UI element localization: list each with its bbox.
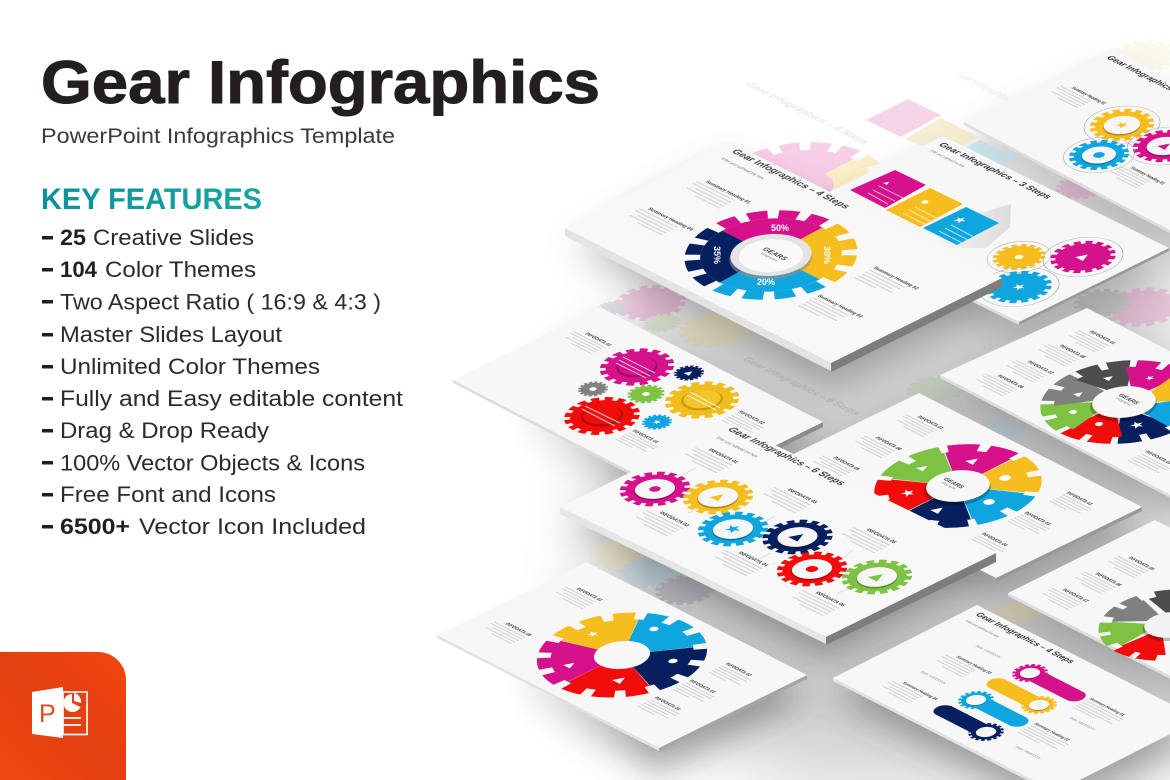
percent labels: 35% (712, 246, 722, 264)
gear: green (622, 382, 670, 406)
gear: navy (670, 363, 708, 383)
ring gear (469, 579, 775, 731)
ambient grey backdrop (560, 170, 1170, 780)
headings: INFODATA 06 (873, 436, 903, 451)
headings: Summary Heading 02 (955, 655, 994, 675)
heading 01 (682, 178, 752, 213)
title: Gear Infographics – 3 Steps (936, 141, 1055, 200)
ghost reflections of slides (579, 35, 1170, 629)
pill: magenta (1007, 662, 1094, 706)
feature 9: Free Font and Icons (60, 482, 276, 507)
title: Gear Infographics – 4 Steps (973, 611, 1078, 665)
slide: left multi gears (453, 307, 823, 499)
headings: INFODATA 05 (831, 456, 861, 471)
gear centre label: GEARS (1116, 393, 1141, 406)
headings: INFODATA 01 (1087, 330, 1117, 345)
feature 1: Creative Slides (93, 225, 254, 250)
heading 02 (855, 266, 920, 299)
gear: red (553, 392, 651, 440)
title: Gear Infographics – 4 Steps (728, 148, 853, 211)
headings: INFODATA 01 (574, 587, 604, 602)
heading 02 (722, 410, 771, 435)
headings: Summary Heading 03 (1033, 722, 1072, 742)
headings: INFODATA 03 (687, 679, 717, 694)
heading 01: INFODATA 01 (583, 332, 613, 347)
feature 2 (42, 257, 256, 282)
ghost box yellow (905, 118, 978, 155)
feature 2: Color Themes (105, 257, 256, 282)
dates: Date: MM/DD/YY (974, 644, 1003, 659)
box yellow (886, 188, 963, 227)
gear segments (1041, 560, 1170, 690)
ring gear icons (563, 626, 679, 684)
headings: INFODATA 02 (1064, 491, 1094, 506)
headings (481, 583, 758, 721)
gear: magenta (1111, 119, 1170, 173)
headings: INFODATA 05 (864, 528, 898, 545)
headings: INFODATA 04 (736, 551, 770, 568)
subtitle: Enter your subhead line here (715, 436, 760, 458)
gear: yellow (974, 235, 1064, 279)
headings (878, 651, 1130, 751)
headings: Summary Heading 04 (901, 681, 940, 701)
box blue (923, 207, 999, 245)
ghost title 6 steps: Gear Infographics – 6 Steps (739, 356, 864, 417)
heading 01: Summary Heading 01 (703, 180, 752, 205)
slide shadows (437, 68, 1170, 780)
gear 8 icons (1067, 375, 1157, 429)
feature 10: 6500+ (60, 514, 130, 539)
percent labels: 50% (771, 223, 789, 233)
subtitle: PowerPoint Infographics Template (41, 125, 395, 148)
ghost gears lower (579, 530, 724, 609)
headings (973, 326, 1170, 475)
gear: magenta (610, 467, 700, 511)
gear centre label: Infographic (940, 481, 958, 490)
heading 03: Summary Heading 03 (815, 294, 864, 319)
ghost box pink (866, 99, 941, 137)
headings (809, 411, 1099, 557)
slide: Gear Infographics 4 Steps (565, 141, 1002, 372)
percent labels: 30% (822, 246, 832, 264)
percent labels (712, 223, 832, 287)
gear 6 icons (899, 457, 1013, 514)
gear: navy (752, 515, 843, 559)
headings: INFODATA 09 (1126, 556, 1156, 571)
gear: green (832, 555, 922, 599)
headings (631, 444, 898, 616)
gear: blue (688, 507, 778, 551)
heading 04: Summary Heading 04 (646, 207, 695, 232)
gear: red (767, 547, 857, 591)
dates (919, 644, 1097, 760)
gear text lines (582, 357, 720, 426)
heading 02: Summary Heading 02 (871, 266, 920, 291)
feature 6: Fully and Easy editable content (60, 386, 404, 411)
headings: INFODATA 02 (657, 511, 691, 528)
heading 02: INFODATA 02 (736, 410, 766, 425)
gear centre label: Infographic (760, 252, 779, 262)
ghost gear pink top (694, 130, 912, 242)
feature 10: Vector Icon Included (139, 514, 366, 539)
feature 5: Unlimited Color Themes (60, 354, 320, 379)
headings: INFODATA 06 (813, 591, 847, 608)
headings: INFODATA 08 (1057, 344, 1087, 359)
gear: yellow (1068, 98, 1170, 152)
box magenta (850, 170, 926, 208)
headings: INFODATA 04 (979, 532, 1009, 547)
gear 4 segments (660, 198, 882, 312)
door (32, 687, 63, 738)
heading 03 (616, 429, 665, 454)
heading 01 (561, 328, 613, 354)
headings: INFODATA 01 (915, 415, 945, 430)
gear: magenta (589, 343, 685, 391)
slide: right 8 segment gear (940, 308, 1170, 503)
P letter: P (39, 700, 56, 728)
slide: Gear Infographics 3 Steps (793, 136, 1169, 325)
percent labels: 20% (757, 277, 775, 287)
slide: Gear Infographics 6 Steps (560, 423, 996, 645)
gear centre label: GEARS (941, 477, 966, 490)
slide: top right 3 gears (964, 48, 1170, 270)
gear 6 segments (811, 413, 1105, 559)
headings: INFODATA 03 (785, 488, 819, 505)
subtitle: Enter your subhead line here (720, 157, 766, 180)
headings: INFODATA 04 (652, 696, 682, 711)
slide: bottom left 5 segment ring gear (437, 562, 807, 752)
connector lines (682, 468, 853, 593)
heading 03 (799, 294, 864, 327)
ghost title small: Gear Infographics (952, 71, 1014, 102)
feature 3: Two Aspect Ratio ( 16:9 & 4:3 ) (60, 290, 381, 314)
feature list (42, 225, 404, 539)
feature 8: 100% Vector Objects & Icons (60, 450, 365, 476)
gear: magenta (1027, 229, 1139, 285)
headings: INFODATA 05 (503, 622, 533, 637)
gear: grey (574, 379, 612, 399)
pill: navy (925, 701, 1009, 743)
slide: 6 segment gear (773, 393, 1142, 582)
ghost title: Gear Infographics – 4 Steps (742, 81, 873, 147)
headings: INFODATA 01 (706, 448, 740, 465)
feature 10 (42, 514, 366, 539)
headings (1038, 552, 1156, 610)
headings: INFODATA 07 (1060, 588, 1090, 603)
ghost box blue (948, 140, 1018, 176)
gear: yellow (654, 376, 750, 424)
title: Gear Infographics (41, 49, 600, 116)
slide: right jigsaw gear (1008, 520, 1170, 710)
headings: INFODATA 03 (1022, 511, 1052, 526)
headings: INFODATA 08 (1093, 572, 1123, 587)
heading: Summary Heading 02 (1069, 86, 1107, 106)
gear centre label: Infographic (1115, 397, 1133, 406)
pill: blue (953, 689, 1037, 731)
gear 8 segments (972, 326, 1170, 478)
subtitle: Enter your subhead line here (964, 619, 1002, 638)
pie (63, 693, 81, 712)
slide: Gear Infographics 4 Steps pills (833, 605, 1170, 780)
heading 04 (625, 205, 695, 240)
feature 4: Master Slides Layout (60, 322, 283, 347)
gear: blue (963, 259, 1075, 315)
subtitle: Enter your subhead line here (929, 149, 967, 168)
headings: INFODATA 07 (1025, 360, 1055, 375)
feature 2: 104 (60, 257, 97, 282)
gear: blue (1049, 130, 1149, 180)
ghost gears left (594, 280, 761, 353)
dates: Date: MM/DD/YY (919, 670, 948, 685)
feature 7: Drag & Drop Ready (60, 418, 270, 443)
arrow (930, 204, 1011, 248)
gear: blue (638, 412, 676, 432)
feature 1: 25 (60, 225, 86, 250)
headings: Summary Heading 01 (1088, 697, 1127, 717)
headings: INFODATA 06 (995, 374, 1025, 389)
dates: Date: MM/DD/YY (1068, 716, 1097, 731)
heading: key features: KEY FEATURES (41, 183, 262, 216)
icon: powerpoint tile (0, 652, 126, 780)
headings: INFODATA 02 (723, 662, 753, 677)
heading 03: INFODATA 03 (630, 429, 660, 444)
ghost gears right (898, 35, 1170, 629)
pill: yellow (978, 674, 1062, 716)
gear: yellow (673, 475, 763, 519)
document outline (63, 692, 87, 734)
dates: Date: MM/DD/YY (1014, 745, 1043, 760)
gear centre label: GEARS (760, 246, 791, 262)
title: Gear Infographics – 6 Steps (724, 426, 849, 487)
document lines (63, 718, 81, 725)
